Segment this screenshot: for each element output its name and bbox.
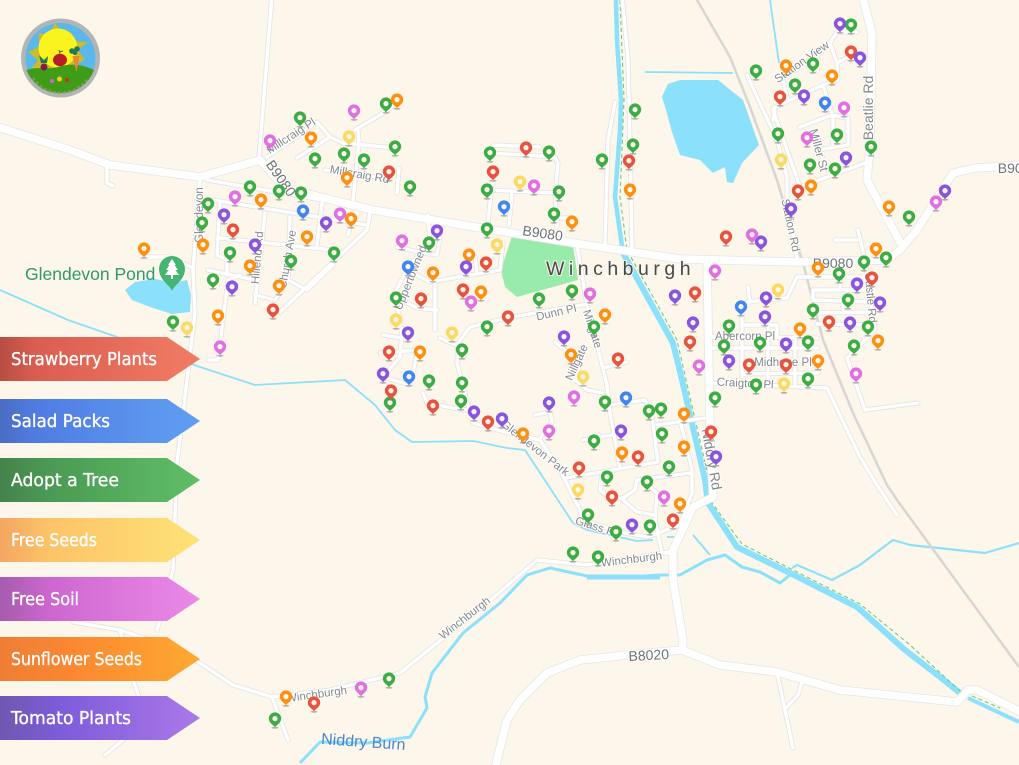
- pins: pink: [214, 101, 942, 698]
- street labels: Millgate: [580, 308, 604, 350]
- arrow: Strawberry Plants: Strawberry Plants: [11, 349, 157, 370]
- icon: tree pin: [159, 256, 185, 291]
- arrow: Free Seeds: [0, 518, 200, 562]
- street labels: Craigton Pl: [716, 377, 774, 391]
- label: Niddry Burn: Niddry Burn: [321, 731, 406, 754]
- green park: [501, 236, 578, 297]
- street labels: Winchburgh: [437, 595, 493, 642]
- street labels: Glendevon Park: [499, 419, 571, 479]
- arrow: Salad Packs: Salad Packs: [11, 411, 110, 432]
- street labels: Castle Rd: [862, 272, 878, 323]
- pins: red: [227, 45, 878, 713]
- pins: blue: [297, 96, 831, 408]
- arrow: Free Soil: [0, 577, 200, 621]
- arrow: Tomato Plants: [0, 696, 200, 740]
- arrow: Adopt a Tree: Adopt a Tree: [11, 470, 119, 491]
- pins: purple: [218, 17, 951, 535]
- street labels: Uppertowned: [393, 244, 430, 312]
- pins: green: [167, 18, 915, 729]
- railway line: [697, 0, 1019, 667]
- street labels: Miller St: [806, 127, 831, 173]
- street labels: Glass Rd: [574, 515, 622, 541]
- street labels: Winchburgh: [285, 685, 348, 705]
- arrow: Free Soil: Free Soil: [11, 589, 79, 610]
- street labels: Nillgate: [564, 343, 591, 383]
- label: Glendevon Pond: Glendevon Pond: [25, 264, 155, 284]
- street labels: Dunn Pl: [535, 303, 578, 324]
- pins: orange: [138, 59, 895, 707]
- big pond: [662, 80, 759, 183]
- Glendevon Pond: [125, 279, 191, 314]
- street labels: Church Ave: [277, 229, 299, 290]
- street labels: Hillend Rd: [250, 231, 266, 285]
- street labels: B9080: [522, 222, 564, 244]
- icon: logo badge: [21, 18, 100, 98]
- street labels: Midhope Pl: [754, 357, 812, 369]
- street labels: Station Rd: [778, 198, 801, 253]
- street labels: Niddry Rd: [699, 427, 725, 491]
- street labels: Abercorn Pl: [715, 331, 775, 343]
- arrow: Free Seeds: Free Seeds: [11, 530, 97, 551]
- label: Winchburgh: Winchburgh: [546, 258, 695, 280]
- arrow: Sunflower Seeds: [0, 637, 200, 681]
- arrow: Sunflower Seeds: Sunflower Seeds: [11, 649, 142, 670]
- arrow: Tomato Plants: Tomato Plants: [10, 708, 131, 729]
- street labels: Millcraig Pl: [265, 116, 318, 157]
- street labels: Station View: [773, 39, 832, 86]
- street labels: Beatlie Rd: [860, 76, 876, 140]
- canal: [615, 0, 623, 253]
- street labels: B9080: [813, 255, 853, 271]
- street labels: Glendevon: [194, 187, 206, 243]
- arrow: Salad Packs: [0, 399, 200, 443]
- canal towpath dashed line: [620, 0, 1000, 708]
- pins: yellow: [181, 130, 790, 500]
- arrow: Adopt a Tree: [0, 458, 200, 502]
- street labels: [194, 39, 1019, 705]
- street labels: Winchburgh: [600, 550, 663, 570]
- street labels: B9080: [263, 157, 299, 199]
- street labels: B8020: [628, 646, 670, 664]
- arrow: Strawberry Plants: [0, 337, 200, 381]
- street labels: Millcraig Rd: [329, 164, 390, 186]
